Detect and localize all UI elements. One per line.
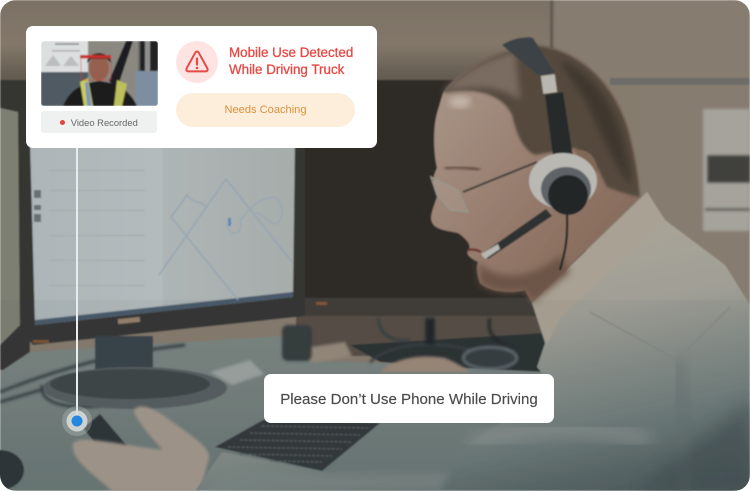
coaching message callout: [264, 374, 554, 423]
driver video thumbnail: [41, 41, 158, 106]
man's shirt and arm: [195, 192, 750, 491]
wall notice: [703, 109, 750, 231]
desk cables and clutter: [0, 318, 517, 407]
glasses: [431, 162, 537, 212]
coaching message callout: Please Don’t Use Phone While Driving: [280, 391, 538, 408]
alert heading: [228, 45, 353, 78]
phone: [83, 414, 128, 449]
main monitor: [18, 90, 305, 345]
monitor stand: [43, 336, 227, 409]
needs coaching pill: Needs Coaching: [224, 104, 307, 116]
keyboard: [215, 420, 380, 471]
far left monitor: [0, 80, 30, 370]
icon: warning triangle: [176, 41, 218, 83]
video recorded label: Video Recorded: [71, 117, 138, 128]
alert heading: While Driving Truck: [229, 62, 344, 77]
man's head and neck: [431, 45, 640, 303]
lower teal shading overlay: [0, 300, 750, 491]
needs coaching pill: [176, 93, 355, 127]
video recorded label: [41, 111, 157, 133]
hand holding phone: [73, 406, 209, 491]
mouse at lower left: [0, 450, 24, 490]
man's hand at desk: [380, 357, 470, 372]
alert heading: Mobile Use Detected: [229, 45, 353, 60]
connector line from card to phone: [76, 148, 78, 416]
headset: [481, 37, 597, 270]
alert card: [26, 26, 377, 148]
desk surface: [0, 333, 560, 491]
rear monitor: [296, 80, 586, 356]
location pin marker on phone: [62, 406, 92, 436]
